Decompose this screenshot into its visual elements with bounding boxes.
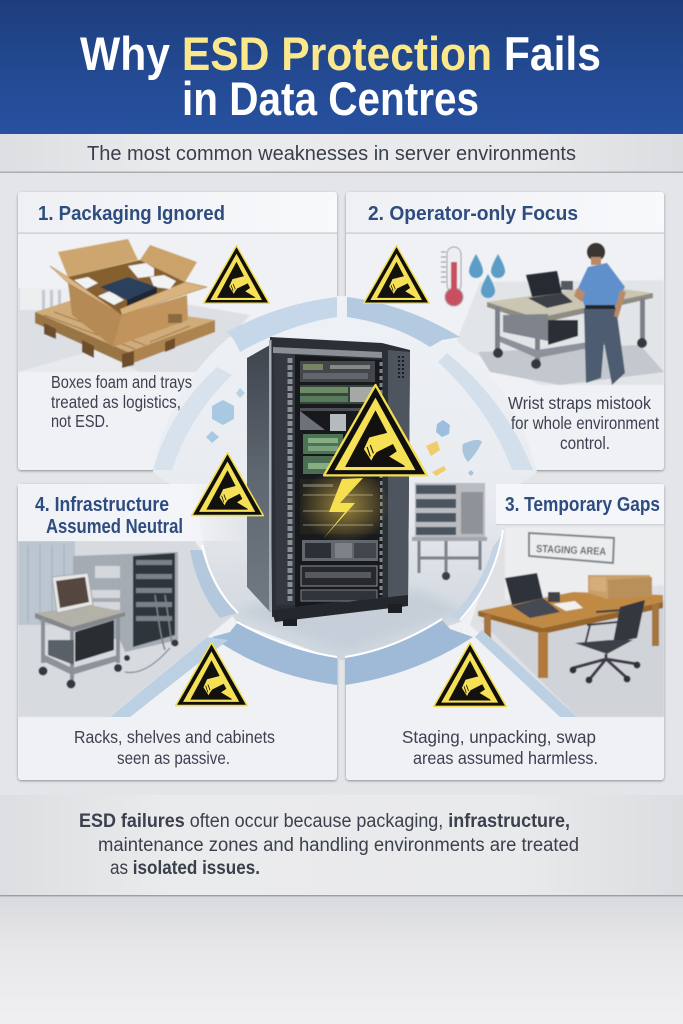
panel: 4 infrastructure assumed neutral (18, 484, 337, 780)
arc: right lower (450, 533, 503, 620)
rack door interior (295, 355, 382, 607)
rack base (272, 595, 408, 622)
heading: temporary gaps: 3. Temporary Gaps (505, 494, 660, 516)
body text: temporary gaps: Staging, unpacking, swap (402, 727, 596, 747)
arc: right upper (438, 353, 533, 470)
icon: esd warning sign, left centre (192, 453, 263, 516)
icon: esd warning sign, panel 2 (364, 246, 429, 303)
server rack (247, 337, 410, 626)
body text: packaging (51, 372, 192, 431)
arc: left lower (190, 550, 237, 618)
arrow: bottom left (212, 623, 337, 685)
footer floor gradient (0, 897, 683, 1024)
body text: packaging: treated as logistics, (51, 392, 181, 412)
decorative scattered cubes (206, 388, 482, 476)
body text: operator: for whole environment (511, 413, 659, 433)
arrow: bottom right (345, 620, 473, 685)
icon: lightning bolt (323, 478, 363, 539)
illustration: operator at workbench (455, 243, 664, 385)
conclusion text (79, 811, 579, 879)
arrow: top left (227, 297, 337, 352)
body text: infrastructure (74, 727, 275, 768)
tail: lower right (475, 630, 577, 717)
icon: esd warning sign, panel 3 (434, 643, 506, 706)
illustration: thermometer and droplets (441, 247, 505, 306)
panel: 2 operator-only focus (346, 192, 664, 470)
rack front frame (270, 337, 410, 617)
central cycle ring (110, 296, 577, 717)
panel 4 heading band (18, 484, 248, 541)
body text: infrastructure: seen as passive. (117, 748, 230, 768)
body text: infrastructure: Racks, shelves and cabinets (74, 727, 275, 747)
tail: lower left (110, 637, 228, 717)
glow (300, 467, 390, 543)
body text: packaging: Boxes foam and trays (51, 372, 192, 392)
conclusion text: as isolated issues. (110, 858, 260, 879)
sign: staging area: STAGING AREA (536, 543, 607, 558)
heading: operator-only focus: 2. Operator-only Focus (368, 203, 578, 225)
illustration: staging area desk (470, 525, 664, 717)
header banner (0, 0, 683, 134)
conclusion text: ESD failures often occur because packaging, infrastructure, (79, 811, 570, 832)
conclusion text: maintenance zones and handling environments are treated (98, 835, 579, 856)
body text: packaging: not ESD. (51, 411, 109, 431)
panel: 3 temporary gaps (346, 484, 664, 780)
heading: infrastructure assumed neutral (35, 494, 183, 538)
heading: infrastructure assumed neutral: Assumed Neutral (46, 516, 183, 538)
heading: infrastructure assumed neutral: 4. Infrastructure (35, 494, 169, 516)
arrow: top right (347, 297, 460, 347)
sign: staging area (529, 533, 614, 563)
body text: temporary gaps: areas assumed harmless. (413, 748, 598, 768)
conclusion band (0, 795, 683, 896)
body text: temporary gaps (402, 727, 598, 768)
panel 3 heading band (496, 484, 664, 525)
illustration: cabinet and monitor cart (18, 541, 240, 717)
illustration: box on pallet (18, 239, 250, 372)
title: Why ESD Protection Fails (80, 27, 601, 80)
panel: 1 packaging ignored (18, 192, 337, 470)
subtitle band: The most common weaknesses in server environments (87, 143, 576, 165)
subtitle band (0, 134, 683, 173)
background rack (412, 483, 487, 580)
rack right side panel (388, 350, 410, 600)
arc: left upper (153, 367, 232, 470)
heading: packaging ignored: 1. Packaging Ignored (38, 203, 225, 225)
body text: operator: control. (560, 433, 610, 453)
body text: operator (508, 393, 659, 453)
rack left side (247, 345, 270, 612)
body text: operator: Wrist straps mistook (508, 393, 651, 413)
title: in Data Centres (182, 72, 479, 125)
server units (300, 361, 380, 601)
icon: esd warning sign, centre (324, 385, 427, 475)
icon: esd warning sign, panel 1 (204, 246, 269, 303)
icon: esd warning sign, panel 4 (176, 643, 247, 706)
title (80, 27, 601, 125)
